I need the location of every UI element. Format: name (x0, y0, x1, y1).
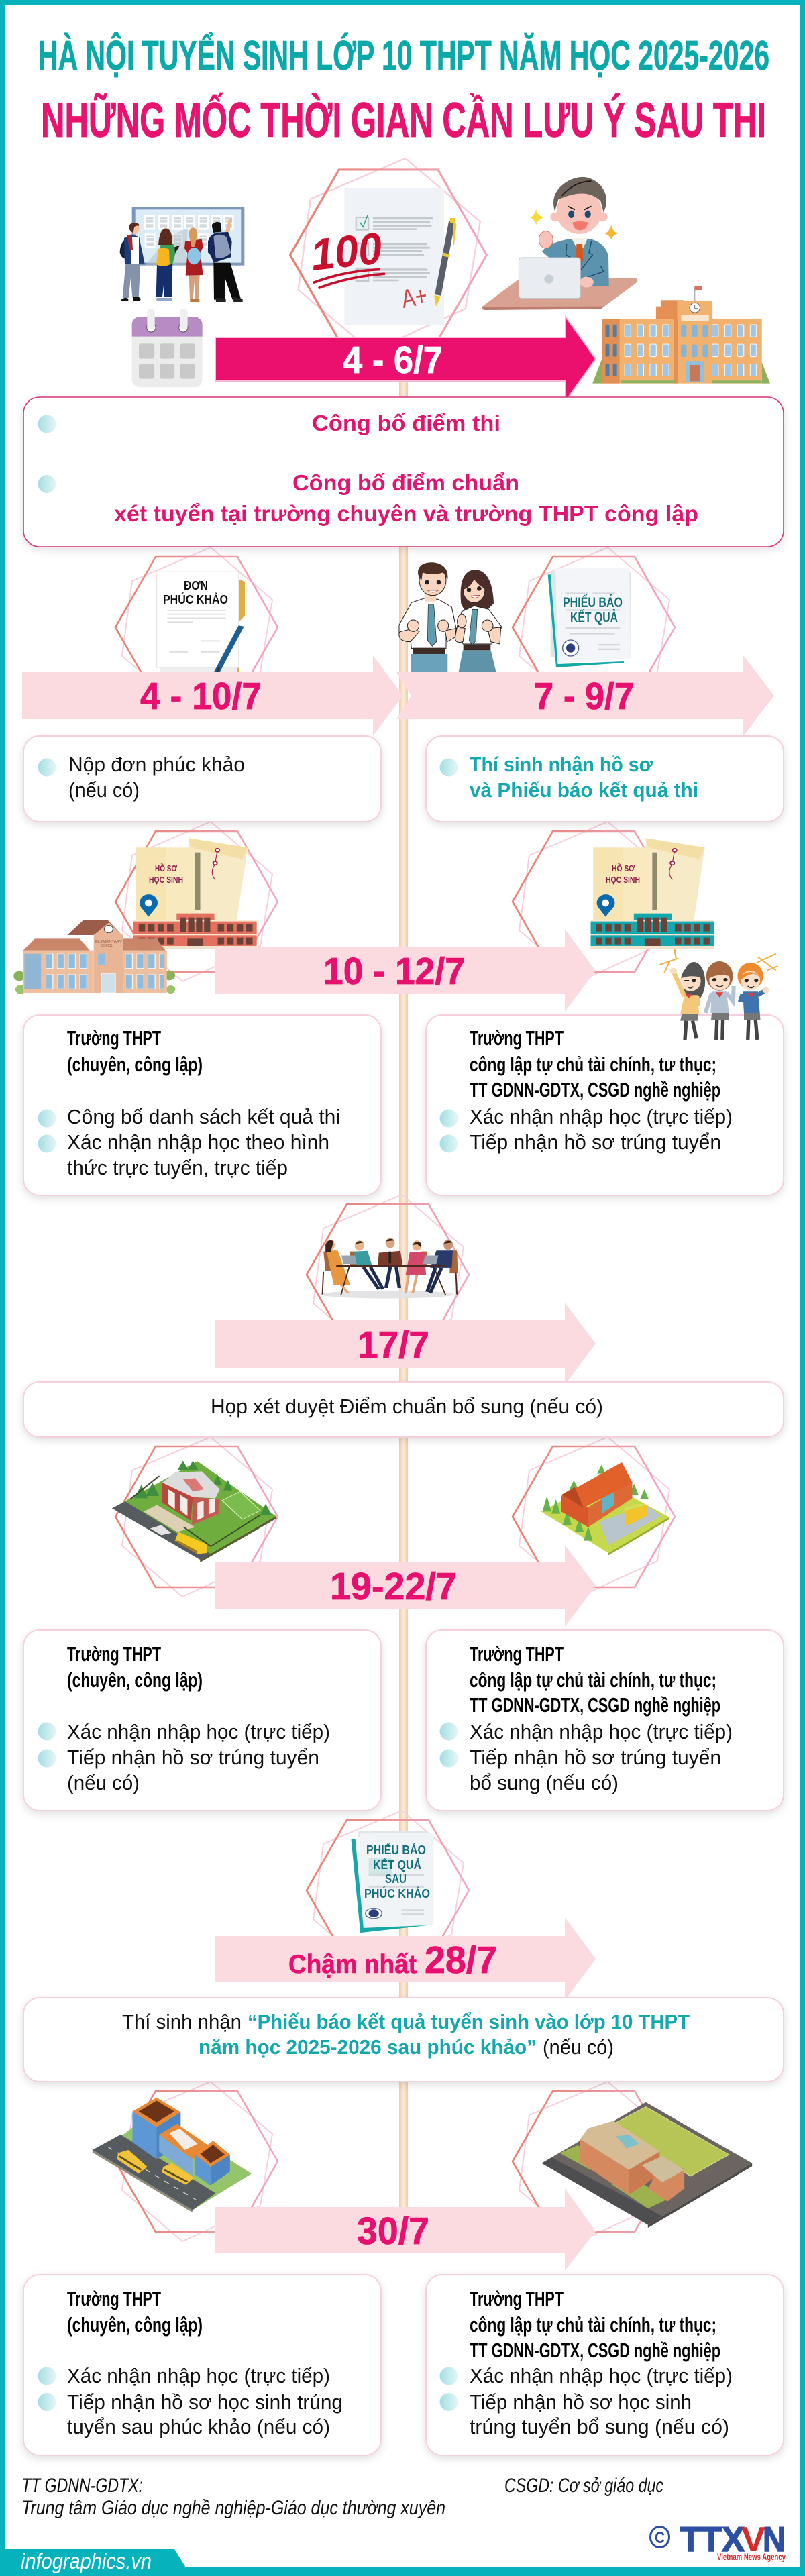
panel: 10-12/7 left: (chuyên, công lập) (67, 1053, 203, 1076)
arrow: 4 - 10/7 (22, 655, 403, 736)
hexagon: school left (115, 1437, 278, 1597)
icon: appeal form with pen (156, 572, 245, 677)
heading: Trường THPT (470, 2287, 564, 2310)
text line 2 tail: (nếu có) (543, 2035, 614, 2059)
logo: TTXVN: N (763, 2520, 786, 2559)
site name: infographics.vn (21, 2548, 152, 2573)
icon: two students thumbs up (399, 562, 502, 676)
date: 4 - 10/7 (140, 675, 262, 718)
icon: calendar (132, 309, 203, 387)
heading: Trường THPT (470, 1026, 564, 1050)
date: 30/7 (357, 2210, 429, 2253)
panel: 19-22/7 left (23, 1630, 381, 1811)
text: score announcement: Công bố điểm thi (312, 411, 500, 435)
text: benchmark announcement: Công bố điểm chuẩn (292, 470, 519, 495)
item: Tiếp nhận hồ sơ trúng tuyển (470, 1746, 721, 1769)
footnote: TT GDNN-GDTX: TT GDNN-GDTX: (21, 2475, 143, 2497)
icon: slip after appeal: PHÚC KHẢO (364, 1886, 430, 1900)
panel: 30/7 right (426, 2275, 784, 2455)
item: Xác nhận nhập học (trực tiếp) (470, 1105, 733, 1128)
hexagon: school right 30/7 (513, 2082, 675, 2241)
item: Tiếp nhận hồ sơ học sinh (470, 2390, 692, 2414)
panel: 19-22/7 right (426, 1630, 784, 1811)
slip text: PHIẾU BÁO (366, 1843, 426, 1857)
icon: slip after appeal: KẾT QUẢ (373, 1858, 421, 1872)
icon: student records with teal building: HỌC SINH (606, 875, 640, 885)
heading: Trường THPT (470, 1642, 564, 1666)
date: 28/7 (425, 1939, 497, 1982)
item: Xác nhận nhập học (trực tiếp) (67, 1720, 330, 1743)
text: benchmark scope: xét tuyển tại trường chuyên và trường THPT công lập (114, 501, 698, 526)
text line 1 lead: Thí sinh nhận (122, 2010, 241, 2033)
item: Tiếp nhận hồ sơ trúng tuyển (470, 1130, 721, 1154)
panel: 30/7 right: công lập tự chủ tài chính, tư thục; (470, 2313, 716, 2337)
arrow: 10 - 12/7 (215, 929, 596, 1012)
panel: 10-12/7 right: công lập tự chủ tài chính, tư thục; (470, 1053, 716, 1076)
slip title: PHIẾU BÁO (563, 595, 623, 610)
arrow: 17/7 (215, 1303, 596, 1385)
icon: student with laptop (482, 177, 637, 310)
panel: 7-9/7: và Phiếu báo kết quả thi (470, 778, 698, 802)
panel: 4-10/7 (23, 736, 381, 822)
panel: 19-22/7 right: bổ sung (nếu có) (470, 1771, 619, 1794)
bullet (38, 2367, 56, 2385)
icon: result slip (548, 568, 631, 667)
bullet (440, 1110, 458, 1127)
icon: exam paper scored 100 (309, 188, 444, 325)
heading: Trường THPT (67, 2287, 161, 2310)
date: 4 - 6/7 (343, 339, 443, 382)
school sign: ELEMENTARY (95, 940, 122, 944)
icon: isometric school with orange roof (541, 1462, 669, 1555)
date: 17/7 (358, 1324, 429, 1366)
bullet (440, 1135, 458, 1152)
title (38, 33, 769, 148)
bullet (440, 2393, 458, 2411)
footnote: CSGD: CSGD: Cơ sở giáo dục (504, 2475, 663, 2497)
hexagon: exam paper (290, 158, 486, 352)
bullet (38, 475, 56, 493)
icon: result slip: KẾT QUẢ (570, 610, 618, 625)
heading: Trường THPT (67, 1026, 161, 1050)
icon: three cheering students (659, 949, 778, 1040)
bullet (38, 415, 56, 433)
timeline line (399, 381, 408, 2209)
text line 2 highlight: năm học 2025-2026 sau phúc khảo” (199, 2035, 537, 2059)
bullet (440, 2367, 458, 2385)
icon: student records with red building (133, 838, 257, 949)
bullet (38, 758, 56, 777)
arrow: 7 - 9/7 (396, 655, 774, 736)
folder label: HỒ SƠ (155, 863, 178, 873)
panel: 10-12/7 left: thức trực tuyến, trực tiếp (67, 1156, 288, 1179)
date: 7 - 9/7 (534, 675, 634, 718)
icon: student records with teal building (591, 838, 714, 949)
bullet (38, 1750, 56, 1767)
panel: 7-9/7 (426, 736, 784, 822)
bullet (38, 2393, 56, 2411)
panel: 28/7 (23, 1998, 784, 2082)
icon: slip after appeal (351, 1831, 434, 1933)
hexagon: school left 30/7 (115, 2082, 278, 2241)
logo: TTXVN: C (655, 2529, 665, 2547)
icon: elementary school (13, 920, 175, 994)
panel: 30/7 left: tuyển sau phúc khảo (nếu có) (67, 2415, 330, 2438)
text: Họp xét duyệt Điểm chuẩn bổ sung (nếu có) (211, 1395, 603, 1418)
panel: 30/7 left (23, 2275, 381, 2455)
arrow: 28/7 (215, 1917, 596, 2000)
footnote: TT GDNN-GDTX (21, 2475, 445, 2519)
panel: 10-12/7 left (23, 1015, 381, 1195)
score text: 100 (309, 223, 384, 280)
logo: TTXVN: V (741, 2520, 765, 2559)
item: Tiếp nhận hồ sơ học sinh trúng (67, 2390, 343, 2414)
panel: 30/7 left: (chuyên, công lập) (67, 2313, 203, 2337)
item: Xác nhận nhập học theo hình (67, 1130, 329, 1154)
date: 10 - 12/7 (323, 950, 465, 993)
logo: TTXVN: TTX (680, 2520, 745, 2559)
heading: Trường THPT (67, 1642, 161, 1666)
logo: TTXVN (651, 2520, 786, 2562)
item: Tiếp nhận hồ sơ trúng tuyển (67, 1746, 319, 1769)
hexagon: appeal form (115, 547, 278, 707)
hexagon: student records left (115, 822, 278, 981)
folder label: HỒ SƠ (612, 863, 635, 873)
icon: isometric school with bus (112, 1460, 276, 1562)
icon: appeal form with pen: PHÚC KHẢO (163, 592, 228, 606)
icon: meeting table (321, 1238, 458, 1298)
bullet (38, 1723, 56, 1740)
icon: pen (434, 218, 457, 307)
bullet (440, 758, 458, 777)
icon: student records with red building: HỌC SINH (149, 875, 183, 885)
icon: isometric school with buses (93, 2098, 252, 2212)
arrow: 19-22/7 (215, 1545, 596, 1627)
panel: 19-22/7 left: (nếu có) (67, 1771, 140, 1794)
arrow: 30/7 (215, 2188, 596, 2271)
panel: 19-22/7 right: công lập tự chủ tài chính, tư thục; (470, 1668, 716, 1692)
bullet (440, 1750, 458, 1767)
icon: elementary school: SCHOOL (101, 944, 113, 948)
grade text: A+ (399, 282, 429, 314)
text: Thí sinh nhận hồ sơ (470, 753, 653, 776)
item: Công bố danh sách kết quả thi (67, 1105, 340, 1128)
arrow: 4 - 6/7 (215, 317, 596, 401)
date prefix: Chậm nhất (288, 1950, 417, 1979)
hexagon: meeting (307, 1195, 469, 1354)
text: Nộp đơn phúc khảo (68, 753, 245, 776)
bullet (38, 1110, 56, 1127)
bullet (440, 1723, 458, 1740)
footer tab (0, 2548, 186, 2576)
icon: slip after appeal: SAU (385, 1872, 407, 1886)
hexagon: updated slip (307, 1811, 469, 1970)
footnote: TT GDNN-GDTX: Trung tâm Giáo dục nghề nghiệp-Giáo dục thường xuyên (21, 2497, 445, 2519)
panel: 4-6/7 (23, 397, 784, 547)
item: Xác nhận nhập học (trực tiếp) (470, 2364, 733, 2387)
bullet (38, 1135, 56, 1152)
item: Xác nhận nhập học (trực tiếp) (67, 2364, 330, 2387)
panel: 19-22/7 left: (chuyên, công lập) (67, 1668, 203, 1692)
icon: isometric school with football field (541, 2102, 752, 2228)
panel: 17/7 (23, 1382, 784, 1437)
hexagon: school right (513, 1437, 675, 1597)
panel: 4-10/7: (nếu có) (68, 778, 140, 802)
item: Xác nhận nhập học (trực tiếp) (470, 1720, 733, 1743)
date: 19-22/7 (330, 1565, 457, 1608)
hexagon: result slip (513, 547, 675, 707)
hexagon: student records right (513, 822, 675, 981)
icon: students at notice board (120, 207, 244, 302)
panel: 30/7 right: trúng tuyển bổ sung (nếu có) (470, 2415, 729, 2438)
text line 1 highlight: “Phiếu báo kết quả tuyển sinh vào lớp 10 THPT (248, 2010, 690, 2033)
form title: ĐƠN (184, 579, 208, 592)
icon: school building (592, 286, 770, 384)
panel: 10-12/7 right (426, 1015, 784, 1195)
